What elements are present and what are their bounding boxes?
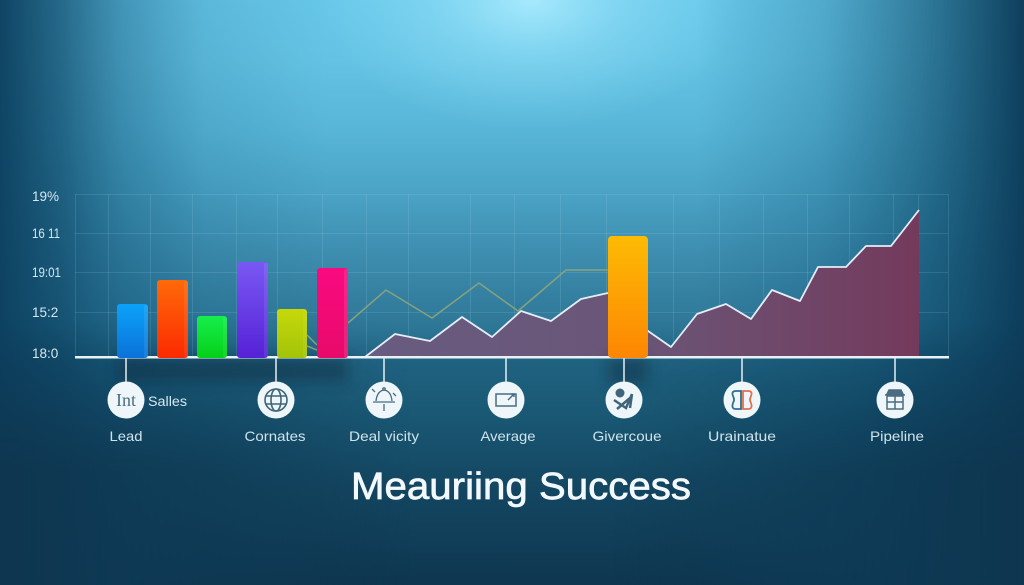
y-axis labels: 19% [32,189,59,204]
icon: figure [606,382,642,418]
bar: orange [157,280,188,358]
y-axis labels: 15:2 [32,305,58,320]
chart [32,189,949,384]
area chart [365,210,919,357]
icon: gauge [366,382,402,418]
bar: green [197,316,227,358]
kpi: urainatue [708,382,776,444]
grid [75,194,948,357]
bar: pink [317,268,348,358]
title: Meauriing Success [351,466,691,508]
label: Urainatue: Urainatue [708,428,776,444]
icon: building [876,382,914,418]
label: Deal vicity: Deal vicity [349,428,419,444]
label: Cornates: Cornates [244,428,306,444]
icon: twin loops [724,382,760,418]
bar: purple [237,262,268,358]
kpi: average [480,382,536,444]
y-axis labels: 19:01 [32,265,61,280]
y-axis labels: 16 11 [32,226,60,241]
label: Pipeline: Pipeline [870,428,924,444]
kpi: givercoue [592,382,662,444]
y-axis labels: 18:0 [32,346,58,361]
y-axis labels [32,189,61,361]
connector lines [126,358,895,384]
kpi: lead [108,382,187,444]
icon: Int badge: Int [116,390,136,410]
kpi: pipeline [870,382,924,444]
kpi: cornates [244,382,306,444]
label: Givercoue: Givercoue [592,428,662,444]
kpi: deal vicity [349,382,419,444]
label: Average: Average [480,428,536,444]
baseline [75,356,949,358]
icon: globe [258,382,294,418]
label: Salles: Salles [148,394,187,409]
bar: lime [277,309,307,358]
bar shadows [117,358,648,384]
olive trend line [307,270,608,350]
label: Lead: Lead [110,428,142,444]
icon: card with arrow [488,382,524,418]
bar: amber [608,236,648,358]
bar: blue [117,304,148,358]
